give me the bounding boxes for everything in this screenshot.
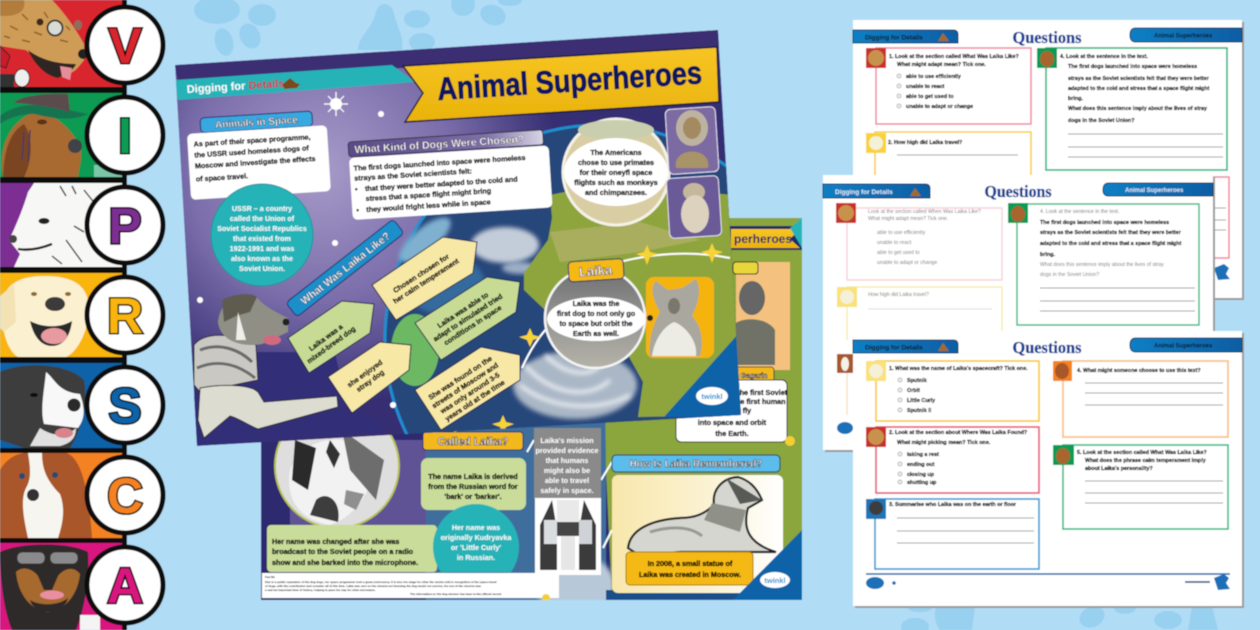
question 9 green box: What does the phrase calm temperament imply [1085,458,1206,464]
grey Laika fact circle: first dog to not only go [557,309,636,318]
tag: found on the streets: She was found on the [427,354,494,402]
right tab: Animal Superheroes [1154,344,1213,350]
letter A [87,547,163,623]
right tab [1130,28,1242,42]
question 1 box: unable to adapt or change [906,104,973,110]
panel: question sheet three [853,331,1244,608]
footer note: Due to a public reputation of the dog-dogs, her space programme took a great controversy. It is also the stage for other the stories told in recognition of the space travel [265,580,497,584]
orange panel with Gagarin photo [730,262,790,370]
grey mission text panel: might also be [544,466,590,475]
Animals in Space tab [200,111,313,133]
photo of Laika [273,434,401,526]
question 1 box faded: able to use efficiently [877,230,926,236]
What Kind of Dogs text box: strays as the Soviet scientists felt: [354,166,472,183]
green name origin box: from the Russian word for [428,482,518,491]
Gagarin text box: Yuri Gagarin was the first Soviet [677,388,788,397]
What Kind of Dogs text box [349,145,552,220]
back poster title banner [728,218,802,250]
grey mission text panel: that humans [546,456,588,465]
question 5 yellow box: Orbit [907,388,920,394]
panel: back poster page [261,218,802,615]
question 9 green box: about Laika's personality? [1085,466,1153,472]
tag: able to adapt [415,277,520,360]
Gagarin text box: into space and orbit [698,418,767,427]
tag: able to adapt: Laika was able to [436,290,491,330]
tag: chosen for calm temperament [372,237,477,320]
Animals in Space text box: the USSR used homeless dogs of [194,143,310,160]
yellow statue caption: In 2008, a small statue of [648,559,733,568]
teal header stripe: Digging for Details [186,78,285,96]
monkey photo bottom [666,175,722,239]
What Kind of Dogs text box: they would fright less while in space [366,197,491,214]
rocket illustration panel [535,498,601,575]
question 5 icon faded [837,354,853,415]
question 4 box: dogs in the Soviet Union? [1040,272,1099,278]
footer note: The information on the dog mission has been in the official record. [410,592,502,596]
tag: mixed-breed dog [288,301,374,373]
tag: found on the streets: years old at the time [443,378,506,423]
yellow statue caption [626,552,753,585]
What Kind of Dogs tab: What Kind of Dogs Were Chosen? [354,133,525,156]
right tab [1103,183,1213,196]
panel: VIPERS strip of dogs and letters [0,0,163,630]
beige primate circle: and chimpanzees. [585,188,647,197]
question 4 box: adapted to the cold and stress that a space flight might [1040,241,1182,247]
grey mission text panel: Laika's mission [540,436,594,445]
question 1 box: unable to react [906,84,945,90]
sheet title: Questions [984,182,1052,201]
What Kind of Dogs text box: The first dogs launched into space were homeless [353,153,526,173]
right tab: Animal Superheroes [1154,34,1213,40]
corner triangle with logo [733,530,802,600]
beige primate circle [563,119,669,225]
letter P [87,187,163,263]
grey Laika fact circle: Laika was the [573,299,619,308]
green name origin box: The name Laika is derived [428,472,518,481]
Gagarin text box [676,380,788,442]
letter V: V [108,18,142,74]
grey mission text panel [534,428,601,499]
teal USSR circle: Soviet Socialist Republics [217,224,307,233]
yellow title banner: Animal Superheroes [436,54,703,107]
What Was Laika Like tab: What Was Laika Like? [299,230,393,307]
corner triangle with logo: twinkl [764,576,786,585]
letter C: C [107,468,143,524]
green name text box: show and she barked into the microphone. [272,558,418,567]
letter S [87,367,163,443]
question 1 box faded: What might adapt mean? Tick one. [868,216,948,222]
gold stars on orbit [492,243,723,434]
right tab [1130,338,1242,352]
grey mission text panel: provided evidence [535,446,599,455]
star decorations on back poster [451,424,795,602]
Called Laika label: Called Laika? [438,436,509,448]
question 1 box faded: able to get used to [877,250,920,256]
letter I [87,97,163,173]
tag: mixed-breed dog: mixed-breed dog [305,324,357,365]
question 1 box: What might adapt mean? Tick one. [897,62,986,68]
sheet title: Questions [1012,338,1082,357]
question 4 box [1008,203,1199,325]
yellow title banner [403,47,719,122]
sheet two footer logo [837,422,853,434]
grey mission text panel: safely in space. [540,486,594,495]
grey Laika fact circle [545,268,645,368]
How is Laika Remembered tab [612,455,780,472]
question 4 box: strays as the Soviet scientists felt that they were better [1068,76,1210,82]
question 2 box: 2. How high did Laika travel? [888,140,962,146]
hidden pink box edge [1040,177,1229,258]
Animals in Space text box: Moscow and investigate the effects [195,154,316,171]
Animals in Space tab: Animals in Space [215,115,299,131]
teal name circle: Her name was [452,523,500,532]
question 1 box faded: Look at the section called When Was Laika Like? [868,209,981,215]
corner triangle with logo [664,333,745,417]
letter R [87,277,163,353]
question 2 box faded [837,287,1002,340]
What Kind of Dogs text box: • [355,185,358,194]
sheet title: Questions [1012,28,1082,47]
footer note: of dogs, with the contribution and consider all of this time. Laika was sent on the mission not knowing the dog would not survive, the rest of the mission was [265,584,481,588]
tag: found on the streets: was only around 3-5 [438,370,501,416]
letter R: R [107,288,143,344]
tag: stray dog: stray dog [354,368,386,394]
teal USSR circle [211,184,313,286]
left tab: Digging for Details [865,344,923,352]
How is Laika Remembered tab: How Is Laika Remembered? [630,459,762,470]
question 5 yellow box: Sputnik [907,378,927,384]
row S: collie [0,363,122,448]
tag: mixed-breed dog: Laika was a [307,322,345,353]
Laika label [568,259,624,282]
panel: front poster page [174,30,742,446]
row I: hat dog [0,93,122,177]
question 5 yellow box [866,361,1039,421]
teal USSR circle: called the Union of [230,214,295,223]
row R: golden retriever [0,273,122,357]
question 2 box faded: How high did Laika travel? [868,292,929,298]
Animals in Space text box [187,125,331,200]
tag: chosen for calm temperament: Chosen chosen for [391,252,451,295]
question 1 box [866,48,1031,124]
question 5 yellow box: Little Curly [907,398,935,404]
Gagarin text box: the Earth. [715,429,749,438]
green name origin box [421,458,526,510]
row A: rottweiler with glasses [0,543,122,630]
letter V [87,7,163,83]
question 6 red box [866,427,1039,493]
question 1 box faded: unable to adapt or change [877,260,937,266]
beige primate circle: chose to use primates [578,158,654,167]
row P: white dog [0,183,122,267]
left tab [823,184,930,198]
tag: able to adapt: conditions in space [442,303,503,347]
question 4 box: What does this sentence imply about the lives of stray [1068,106,1207,112]
Called Laika label [423,432,523,450]
question 4 box: strays as the Soviet scientists felt that they were better [1040,230,1182,236]
statue box [612,475,783,593]
tag: stray dog: she enjoyed [345,358,384,389]
teal name circle: in Russian. [457,553,495,562]
letter I: I [118,108,132,164]
left tab [853,340,958,353]
letter A: A [107,558,143,614]
teal name circle: originally Kudryavka [441,533,512,542]
left tab: Digging for Details [865,34,923,42]
left tab: Digging for Details [835,189,893,196]
question 4 box: 4. Look at the sentence in the text. [1040,209,1119,215]
row V: glasses dog [0,0,122,87]
teal USSR circle: 1922-1991 and was [230,244,294,253]
question 4 box: What does this sentence imply about the lives of stray [1040,262,1164,268]
What Kind of Dogs text box: stress that a space flight might bring [365,186,491,203]
Yuri Gagarin label [737,366,775,380]
grey Laika fact circle: to space but orbit the [559,319,633,328]
Laika label: Laika [579,262,613,279]
question 1 box faded [836,203,1002,280]
beige primate circle: flights such as monkeys [574,178,658,187]
green name text box: broadcast to the Soviet people on a radio [272,547,414,556]
Laika in spacesuit illustration [194,294,338,438]
question 4 box: bring. [1040,252,1055,258]
question 2 box [866,132,1031,200]
question 5 yellow box: 1. What was the name of Laika's spacecraft? Tick one. [889,366,1028,372]
sheet one footer logo [1214,264,1230,280]
Animals in Space text box: As part of their space programme, [193,132,311,149]
sheet footer [866,574,1230,590]
left tab [853,30,958,43]
stars [190,92,396,408]
tag: chosen for calm temperament: her calm temperament [391,256,461,306]
orbit line and stars [522,254,730,368]
question 9 green box: 5. Look at the section called What Was Laika Like? [1077,450,1207,456]
earth globe [383,123,741,435]
right tab: Animal Superheroes [1125,188,1184,194]
question 8 orange box: 4. What might someone choose to use this text? [1077,368,1201,374]
question 8 orange box [1053,361,1228,437]
question 4 box: The first dogs launched into space were homeless [1068,64,1197,70]
Laika photo [646,277,714,358]
beige primate circle: The Americans [590,148,642,157]
question 6 red box: ending out [907,462,935,468]
question 7 blue box: 3. Summarise who Laika was on the earth or floor [889,502,1017,508]
yellow statue caption: Laika was created in Moscow. [639,570,741,579]
question 4 box: bring. [1068,96,1083,102]
teal USSR circle: that existed from [233,234,291,243]
row C: spaniel [0,453,122,538]
What Was Laika Like tab [286,219,404,317]
teal USSR circle: USSR – a country [232,204,292,213]
question 1 box faded: unable to react [877,240,912,246]
beige primate circle: for their oneyfl space [580,168,652,177]
question 6 red box: shutting up [907,480,937,486]
Gagarin text box: cosmonaut and the first human [678,397,786,406]
teal name circle: or 'Little Curly' [451,543,501,552]
tag: found on the streets: streets of Moscow and [430,361,500,410]
letter C [87,457,163,533]
tag: stray dog [328,342,411,413]
question 1 box: 1. Look at the section called What Was Laika Like? [889,54,1019,60]
question 4 box: The first dogs launched into space were homeless [1040,220,1169,226]
teal USSR circle: also known as the [231,254,293,263]
tag: able to adapt: adapt to simulated tried [431,292,504,343]
question 5 yellow box: Sputnik II [907,408,932,414]
grey mission text panel: able to travel [545,476,589,485]
letter P: P [108,198,142,254]
panel: question sheet two [823,175,1215,452]
What Kind of Dogs text box: • [356,205,360,215]
question 6 red box: 2. Look at the section about Where Was Laika Found? [889,430,1027,436]
Animals in Space text box: of space travel. [196,171,248,184]
question 1 box: able to get used to [906,94,954,100]
question 1 box: able to use efficiently [906,74,961,80]
Gagarin text box: being to fly [713,406,751,415]
tag: found on the streets [415,347,520,430]
teal name circle [433,504,519,572]
corner triangle with logo: twinkl [701,392,723,401]
green name origin box: 'bark' or 'barker'. [444,492,502,501]
question 4 box: dogs in the Soviet Union? [1068,118,1134,124]
monkey photo top [665,106,719,175]
teal header stripe [175,65,415,100]
question 6 red box: taking a rest [907,452,939,458]
question 4 box: adapted to the cold and stress that a space flight might [1068,86,1210,92]
back poster title banner: perheroes [734,232,792,246]
Yuri Gagarin label: Gagarin [740,371,768,380]
green name text box: Her name was changed after she was [272,537,399,546]
question 6 red box: closing up [907,472,935,478]
question 6 red box: What might picking mean? Tick one. [897,440,991,446]
question 7 blue box [866,499,1039,569]
teal USSR circle: Soviet Union. [239,264,285,273]
question 9 green box [1053,445,1228,529]
What Kind of Dogs text box: that they were better adapted to the cold and [365,174,518,193]
footer note: a sad but important time of history, helping to pave the way for other astronauts. [265,588,376,592]
grey Laika fact circle: Earth as well. [573,329,619,338]
letter S: S [108,378,142,434]
label small heading [733,262,758,274]
question 4 box: 4. Look at the sentence in the text. [1060,54,1149,60]
africa landmass [524,185,741,417]
panel: question sheet one [853,20,1244,300]
footer note: Fact file [265,575,275,579]
green name text box [267,525,437,572]
question 4 box [1037,48,1227,170]
footer note [262,573,559,598]
